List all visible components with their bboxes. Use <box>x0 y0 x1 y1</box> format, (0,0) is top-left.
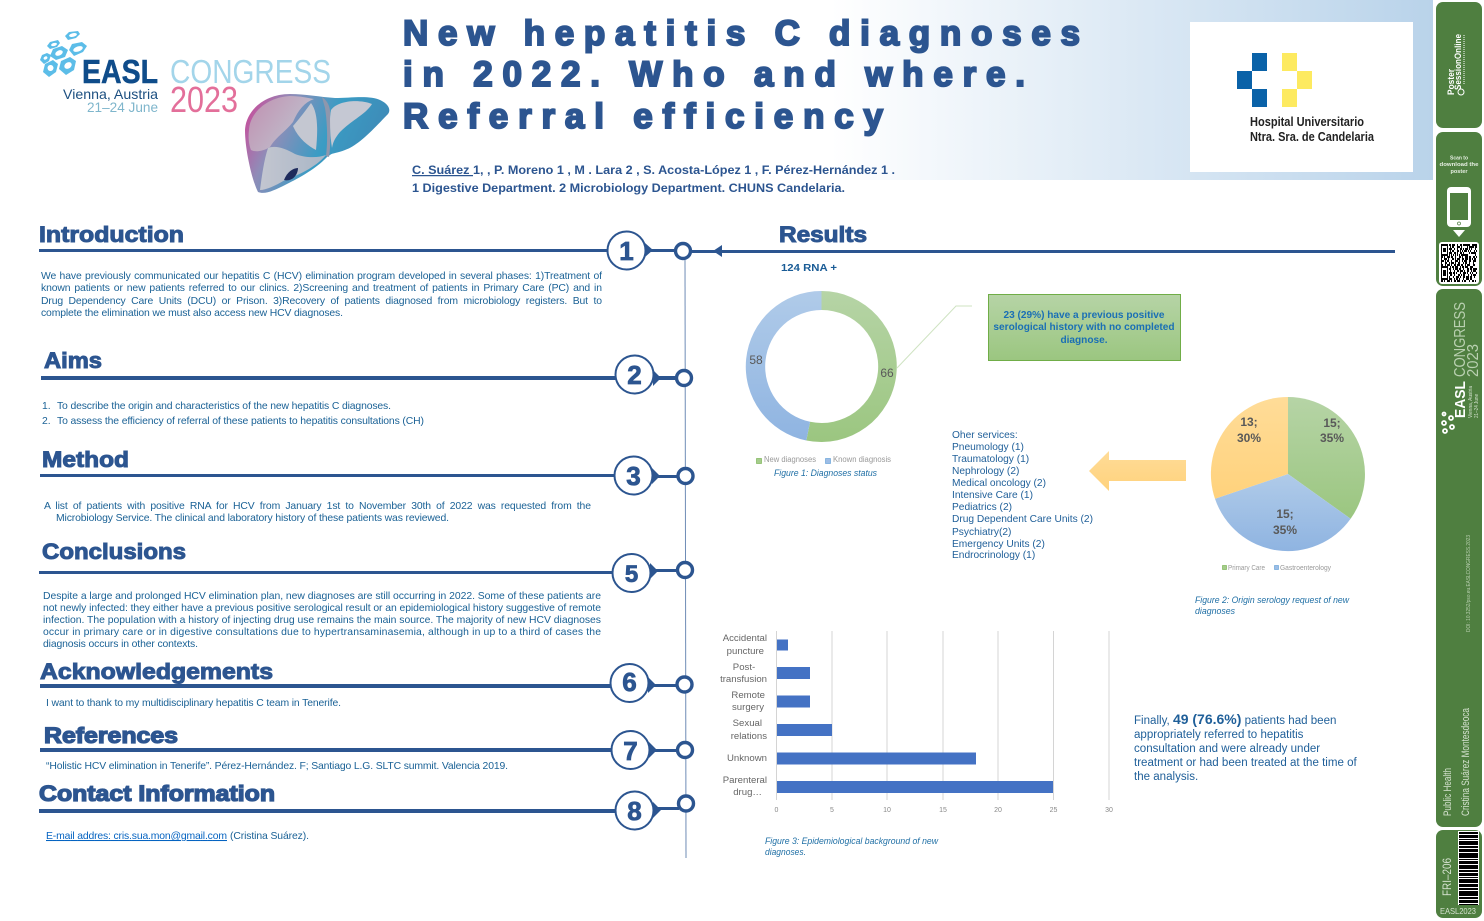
text block: referral efficiency finding: the analysis. <box>1134 771 1198 783</box>
timeline node 8 <box>616 792 694 830</box>
bar chart: epidemiological background: drug… <box>733 787 762 798</box>
authors and affiliations: 1 Digestive Department. 2 Microbiology Department. CHUNS Candelaria. <box>412 181 845 195</box>
pie chart: origin of serology request: 35% <box>1320 431 1344 445</box>
hospital logo: Ntra. Sra. de Candelaria <box>1250 130 1375 144</box>
list: other services: Pneumology (1) <box>952 442 1024 453</box>
section: conclusions: Conclusions <box>42 539 186 564</box>
text block: referral efficiency finding: consultation and were already under <box>1134 743 1320 755</box>
timeline node 8: 8 <box>627 796 642 826</box>
section: contact information: Contact Information <box>39 781 275 806</box>
hospital logo: Hospital Universitario <box>1250 115 1364 129</box>
pie chart: origin of serology request: 15; <box>1323 416 1341 430</box>
arrow: from pie to other services <box>1089 451 1186 491</box>
sidebar panel: congress and author: Cristina Suárez Montesdeoca <box>1460 707 1472 816</box>
bar chart: epidemiological background: 5 <box>830 807 834 814</box>
EASL Congress logo: Vienna, Austria <box>63 86 158 102</box>
title: New hepatitis C diagnoses <box>403 14 1080 53</box>
sidebar panel: scan to download <box>1436 132 1482 286</box>
section: contact information <box>39 781 615 842</box>
timeline node 7 <box>612 731 692 769</box>
text block: referral efficiency finding: appropriately referred to hepatitis <box>1134 729 1304 741</box>
sidebar panel: congress and author <box>1436 289 1482 827</box>
sidebar panel: congress and author: CONGRESS <box>1452 302 1469 377</box>
bar chart: epidemiological background: relations <box>731 731 767 742</box>
pie chart: origin of serology request: 15; <box>1276 507 1294 521</box>
sidebar panel: poster session online: Poster <box>1446 69 1457 95</box>
section: aims: To assess the efficiency of referral of these patients to hepatitis consultations (CH) <box>57 416 424 427</box>
title <box>403 14 1080 136</box>
sidebar panel: scan to download: poster <box>1450 169 1468 175</box>
bar chart: epidemiological background: 30 <box>1105 807 1113 814</box>
timeline node 7: 7 <box>623 736 638 766</box>
title: Referral efficiency <box>403 97 884 136</box>
sidebar panel: congress and author: 2023 <box>1465 344 1482 377</box>
section: method: Method <box>42 447 129 472</box>
title: in 2022. Who and where. <box>403 55 1025 94</box>
bar chart: epidemiological background: Remote <box>731 690 765 701</box>
caption: figure 1: Figure 1: Diagnoses status <box>774 468 877 478</box>
bar chart: epidemiological background: Accidental <box>723 633 767 644</box>
EASL Congress logo: 2023 <box>170 79 238 120</box>
bar chart: epidemiological background: Parenteral <box>723 775 767 786</box>
list: other services <box>952 430 1093 561</box>
callout: previous serological history: serological history with no completed <box>993 322 1175 333</box>
timeline node 1: 1 <box>619 236 634 266</box>
list: other services: Drug Dependent Care Units (2) <box>952 514 1093 525</box>
section: introduction <box>39 222 609 319</box>
donut chart: diagnoses status: 66 <box>880 366 894 380</box>
section: acknowledgements: Acknowledgements <box>40 659 273 684</box>
bar chart: epidemiological background: 25 <box>1050 807 1057 814</box>
list: other services: Emergency Units (2) <box>952 539 1045 550</box>
section: conclusions <box>39 539 613 650</box>
section: references: References <box>44 723 178 748</box>
caption: figure 2: diagnoses <box>1195 606 1235 616</box>
section heading: results <box>691 222 1395 257</box>
section: introduction: complete the elimination we must also access new HCV diagnoses. <box>41 308 343 319</box>
bar chart: epidemiological background: 15 <box>939 807 947 814</box>
pie legend: Gastroenterology <box>1280 565 1331 572</box>
section: conclusions: not newly infected: they either have a previous positive serological result or an epidemiological history suggestive of remote <box>43 603 601 614</box>
bar chart: epidemiological background: puncture <box>727 646 764 657</box>
section: acknowledgements: I want to thank to my multidisciplinary hepatitis C team in Tenerife. <box>46 698 341 709</box>
sidebar panel: poster session online <box>1436 2 1482 128</box>
timeline node 5: 5 <box>625 561 638 588</box>
timeline node 6: 6 <box>622 667 637 697</box>
timeline spine <box>685 258 686 858</box>
sidebar panel: poster id and barcode <box>1436 830 1482 918</box>
timeline node 1 <box>608 232 690 270</box>
list: other services: Nephrology (2) <box>952 466 1019 477</box>
section: aims: To describe the origin and characteristics of the new hepatitis C diagnoses. <box>57 401 391 412</box>
sidebar panel: poster session online: SessionOnline <box>1453 34 1463 90</box>
list: other services: Oher services: <box>952 430 1018 441</box>
section: acknowledgements <box>40 659 612 709</box>
EASL Congress logo <box>40 31 331 120</box>
sidebar panel: congress and author: 21–24 June <box>1474 394 1480 418</box>
donut chart: diagnoses status <box>746 291 897 442</box>
bar chart: epidemiological background: 0 <box>775 807 779 814</box>
pie chart: origin of serology request: 35% <box>1273 523 1297 537</box>
pie legend <box>1222 565 1331 572</box>
caption: figure 3 <box>765 836 938 857</box>
section: aims: 2. <box>42 416 51 427</box>
authors and affiliations: C. Suárez 1, , P. Moreno 1 , M . Lara 2 , S. Acosta-López 1 , F. Pérez-Hernández 1 . <box>412 163 895 177</box>
pie chart: origin of serology request: 30% <box>1237 431 1261 445</box>
text block: referral efficiency finding: Finally, 49 (76.6%) patients had been <box>1134 711 1336 727</box>
donut legend: Known diagnosis <box>833 455 891 464</box>
pie chart: origin of serology request: 13; <box>1240 415 1258 429</box>
bar chart: epidemiological background: 10 <box>883 807 891 814</box>
section: aims: 1. <box>42 401 51 412</box>
EASL Congress logo: EASL <box>82 53 158 90</box>
sidebar panel: poster id and barcode: FRI–206 <box>1440 858 1454 896</box>
sidebar panel: congress and author: DOI: 10.3252/pso.eu.EASLCONGRESS.2023 <box>1466 535 1472 632</box>
section: aims <box>41 348 616 427</box>
sidebar panel: congress and author: Vienna, Austria <box>1468 385 1474 418</box>
section: introduction: We have previously communicated our hepatitis C (HCV) elimination program developed in several phases: 1)Treatment of <box>41 271 602 282</box>
sidebar panel: scan to download: Scan to <box>1450 156 1469 162</box>
section: conclusions: diagnosis occurs in other contexts. <box>43 639 198 650</box>
timeline node 3: 3 <box>626 461 641 491</box>
caption: figure 3: diagnoses. <box>765 847 806 857</box>
timeline node 2: 2 <box>627 360 642 390</box>
section: method <box>40 447 615 524</box>
list: other services: Medical oncology (2) <box>952 478 1046 489</box>
timeline node 3 <box>614 456 693 494</box>
bar chart: epidemiological background <box>720 631 1113 814</box>
section: references <box>40 723 613 772</box>
label: 124 RNA+: 124 RNA + <box>781 262 837 274</box>
QR code <box>1441 245 1477 281</box>
section: method: Microbiology Service. The clinical and laboratory history of these patients was reviewed. <box>56 513 449 524</box>
callout leader line <box>897 306 972 368</box>
section: method: A list of patients with positive RNA for HCV from January 1st to November 30th of 2022 was requested from the <box>44 501 591 512</box>
pie chart: origin of serology request <box>1211 397 1365 551</box>
authors and affiliations <box>412 163 895 195</box>
section: aims: Aims <box>44 348 102 373</box>
list: other services: Intensive Care (1) <box>952 490 1033 501</box>
EASL Congress logo: 21–24 June <box>87 99 158 115</box>
section: references: “Holistic HCV elimination in Tenerife”. Pérez-Hernández. F; Santiago L.G. SLTC summit. Valencia 2019. <box>46 761 508 772</box>
caption: figure 3: Figure 3: Epidemiological background of new <box>765 836 938 846</box>
sidebar panel: congress and author: Public Health <box>1442 768 1454 816</box>
section: conclusions: occur in primary care or in digestive consultations due to hypertransaminasemia, although in up to a third of cases the <box>43 627 601 638</box>
callout: previous serological history: diagnose. <box>1060 335 1108 346</box>
bar chart: epidemiological background: Sexual <box>733 718 762 729</box>
callout: previous serological history: 23 (29%) have a previous positive <box>1003 310 1165 321</box>
sidebar panel: scan to download: download the <box>1440 162 1478 168</box>
hospital logo <box>1190 22 1413 172</box>
bar chart: epidemiological background: surgery <box>732 702 764 713</box>
sidebar panel: congress and author: EASL <box>1452 381 1469 418</box>
caption: figure 2: Figure 2: Origin serology request of new <box>1195 595 1349 605</box>
bar chart: epidemiological background: transfusion <box>720 674 767 685</box>
sidebar panel: poster id and barcode: EASL2023 <box>1440 906 1476 916</box>
icon: liver illustration <box>245 94 389 193</box>
section: contact information: (Cristina Suárez). <box>230 831 309 842</box>
timeline node 2 <box>616 356 692 394</box>
section: contact information: E-mail addres: cris.sua.mon@gmail.com <box>46 831 227 842</box>
callout: previous serological history <box>988 294 1180 360</box>
donut legend <box>756 455 891 464</box>
bar chart: epidemiological background: 20 <box>994 807 1002 814</box>
pie legend: Primary Care <box>1228 565 1265 572</box>
list: other services: Pediatrics (2) <box>952 502 1012 513</box>
section: introduction: Drug Dependency Care Units (DCU) or Prison. 3)Recovery of patients diagnosed from microbiology registers. But to <box>41 296 602 307</box>
EASL Congress logo: CONGRESS <box>170 53 331 90</box>
list: other services: Traumatology (1) <box>952 454 1029 465</box>
section: conclusions: Despite a large and prolonged HCV elimination plan, new diagnoses are still occurring in 2022. Some of these patients are <box>43 591 601 602</box>
section: conclusions: infection. The population with a history of injecting drug use remains the main source. The majority of new HCV diagnoses <box>43 615 601 626</box>
timeline node 5 <box>612 554 692 592</box>
bar chart: epidemiological background: Unknown <box>727 753 767 764</box>
text block: referral efficiency finding <box>1134 711 1358 783</box>
header gradient band <box>0 0 1433 180</box>
timeline node 6 <box>610 664 692 702</box>
list: other services: Endrocrinology (1) <box>952 550 1035 561</box>
text block: referral efficiency finding: treatment or had been treated at the time of <box>1134 757 1358 769</box>
bar chart: epidemiological background: Post- <box>733 662 755 673</box>
section: introduction: known patients or new patients referred to our clinics. 2)Screening and treatment of patients in Primary Care (PC) and in <box>41 283 602 294</box>
donut chart: diagnoses status: 58 <box>749 353 763 367</box>
list: other services: Psychiatry(2) <box>952 527 1011 538</box>
caption: figure 2 <box>1195 595 1349 616</box>
section heading: results: Results <box>779 222 867 247</box>
donut legend: New diagnoses <box>764 455 816 464</box>
section: introduction: Introduction <box>39 222 184 247</box>
